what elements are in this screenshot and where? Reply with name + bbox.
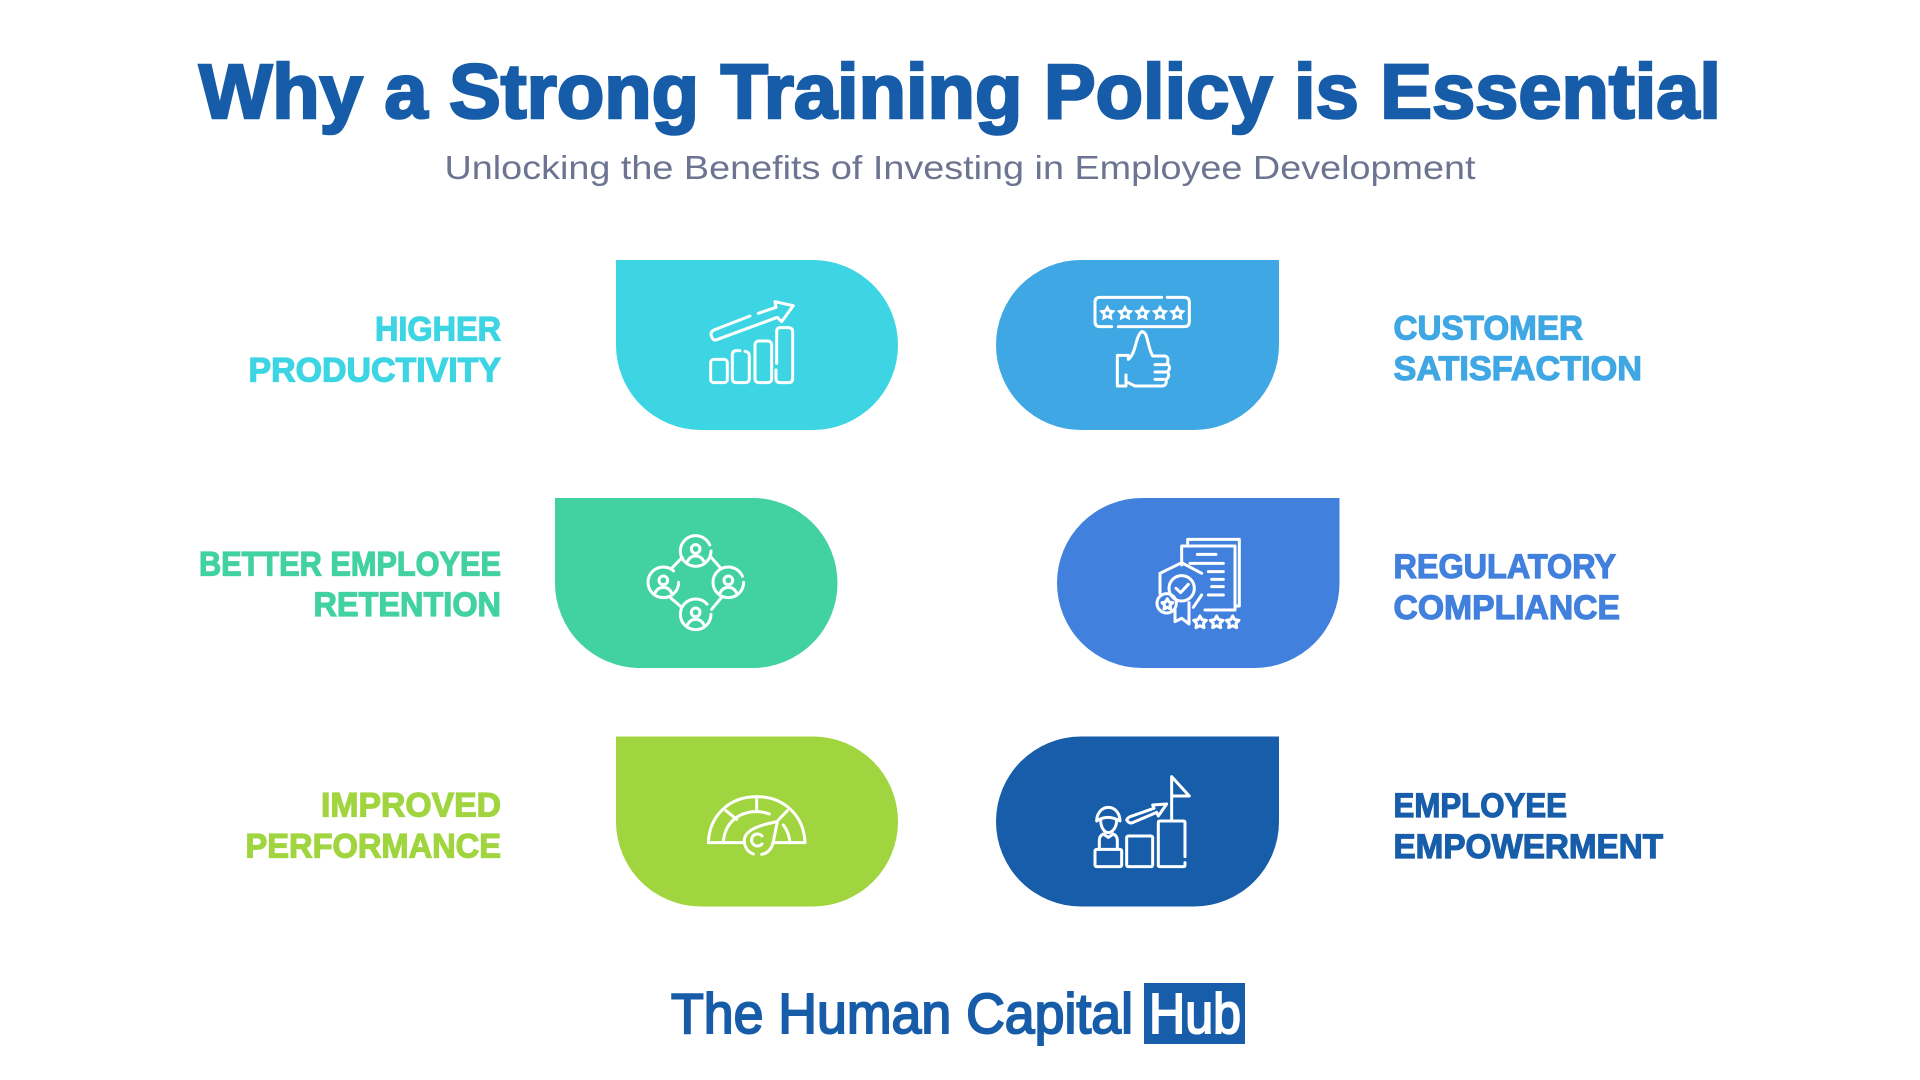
label: higher productivity: [248, 310, 501, 390]
shape: green card: [555, 498, 838, 668]
icon: rising bar chart: [711, 302, 793, 383]
subtitle: Unlocking the Benefits of Investing in Employee Development: [444, 149, 1476, 186]
panel: customer satisfaction: [996, 260, 1642, 430]
label: regulatory compliance: REGULATORY: [1394, 548, 1616, 586]
icon: documents with certificate badge: [1157, 539, 1239, 628]
label: better employee retention: BETTER EMPLOYEE: [199, 546, 501, 584]
label: better employee retention: RETENTION: [314, 586, 501, 624]
label: regulatory compliance: [1394, 548, 1620, 627]
shape: navy card: [996, 736, 1279, 906]
label: employee empowerment: EMPLOYEE: [1394, 787, 1567, 825]
label: improved performance: IMPROVED: [321, 786, 501, 824]
icon: thumbs up with stars: [1095, 297, 1189, 386]
title: Why a Strong Training Policy is Essential: [199, 49, 1721, 135]
label: employee empowerment: [1394, 787, 1663, 866]
label: improved performance: PERFORMANCE: [246, 828, 501, 866]
icon: person climbing steps to flag: [1095, 777, 1189, 867]
icon: connected people network: [648, 536, 744, 630]
logo badge: [1144, 983, 1245, 1044]
panel: regulatory compliance: [1057, 498, 1620, 668]
label: customer satisfaction: SATISFACTION: [1394, 350, 1642, 388]
label: higher productivity: HIGHER: [375, 310, 501, 348]
label: customer satisfaction: [1394, 310, 1642, 388]
label: customer satisfaction: CUSTOMER: [1394, 310, 1583, 348]
label: better employee retention: [199, 546, 501, 624]
shape: royal blue card: [1057, 498, 1340, 668]
logo text: The Human Capital: [671, 982, 1133, 1046]
logo badge text: Hub: [1149, 982, 1241, 1046]
icon: performance gauge: [708, 797, 805, 854]
label: employee empowerment: EMPOWERMENT: [1394, 828, 1663, 866]
label: improved performance: [246, 786, 501, 866]
shape: blue card: [996, 260, 1279, 430]
shape: lime card: [616, 736, 898, 906]
logo: The Human Capital Hub: [671, 982, 1245, 1046]
label: higher productivity: PRODUCTIVITY: [248, 352, 501, 390]
panel: better employee retention: [199, 498, 838, 668]
panel: employee empowerment: [996, 736, 1663, 906]
panel: higher productivity: [248, 260, 898, 430]
shape: cyan card: [616, 260, 898, 430]
panel: improved performance: [246, 736, 898, 906]
label: regulatory compliance: COMPLIANCE: [1394, 589, 1620, 627]
